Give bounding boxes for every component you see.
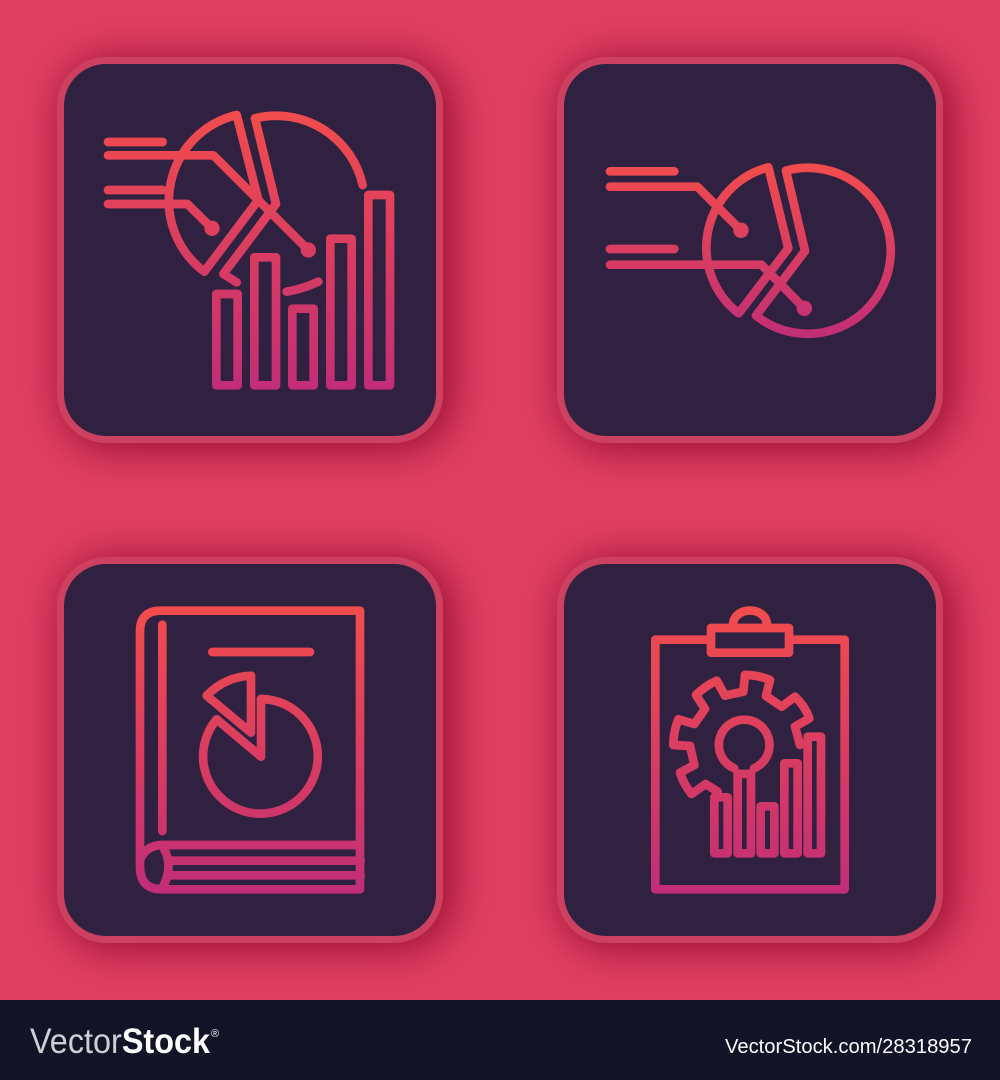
icon: exploded pie chart with legend lines bbox=[606, 163, 896, 338]
panel: pie chart and bar chart bbox=[57, 57, 443, 443]
panel: report book bbox=[57, 557, 443, 943]
image id text: VectorStock.com/28318957 bbox=[725, 1036, 972, 1058]
icon: pie chart with legend lines and bars bbox=[104, 110, 394, 390]
panel: exploded pie chart bbox=[557, 57, 943, 443]
panel: clipboard with gear and bars bbox=[557, 557, 943, 943]
logo: VectorStock wordmark: VectorStock bbox=[30, 1022, 210, 1061]
icon: clipboard with gear and bar chart bbox=[651, 606, 849, 894]
logo: VectorStock wordmark: ® bbox=[211, 1028, 219, 1040]
icon: book with pie chart cover bbox=[136, 606, 365, 894]
footer bar bbox=[0, 1000, 1000, 1080]
